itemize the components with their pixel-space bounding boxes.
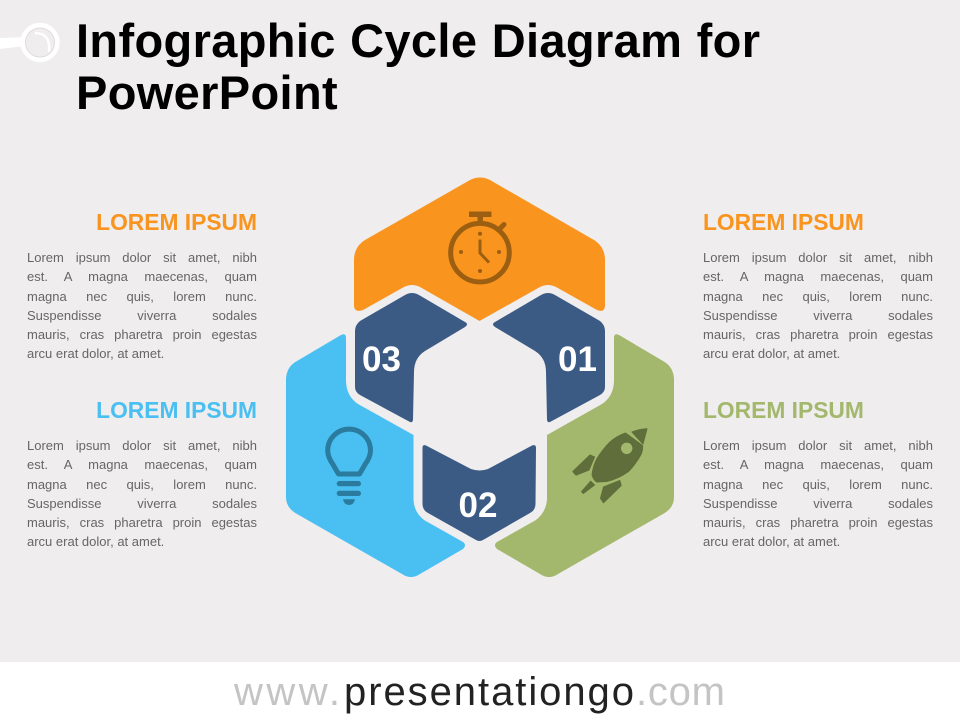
- text block: orange left: Lorem ipsum dolor sit amet, nibh: [27, 250, 257, 265]
- text block: orange left: magna nec quis, lorem nunc.: [27, 289, 257, 304]
- title: PowerPoint: [76, 66, 338, 119]
- text block: green right: Suspendisse viverra sodales: [703, 496, 933, 511]
- footer band: presentationgo: [344, 670, 634, 714]
- text block: orange right: mauris, cras pharetra proin egestas: [703, 327, 933, 342]
- text block: orange left: [27, 250, 257, 361]
- icon: stopwatch: [451, 212, 509, 282]
- heading: orange left: LOREM IPSUM: [96, 209, 257, 235]
- text block: blue left: Lorem ipsum dolor sit amet, nibh: [27, 438, 257, 453]
- text block: blue left: arcu erat dolor, at amet.: [27, 534, 164, 549]
- text block: green right: Lorem ipsum dolor sit amet, nibh: [703, 438, 933, 453]
- orange segment: [354, 178, 605, 321]
- footer band: .com: [636, 670, 725, 714]
- footer band: www.: [233, 670, 340, 714]
- text block: orange left: arcu erat dolor, at amet.: [27, 346, 164, 361]
- number 01: 01: [558, 340, 597, 379]
- panel: bottom right text: [703, 397, 933, 549]
- title: [76, 14, 760, 119]
- text block: orange right: est. A magna maecenas, quam: [703, 269, 933, 284]
- green segment: [495, 334, 674, 577]
- footer band: [0, 662, 960, 720]
- icon: rocket: [573, 429, 647, 503]
- text block: orange right: magna nec quis, lorem nunc.: [703, 289, 933, 304]
- panel: top left text: [27, 209, 257, 361]
- navy segment 03: [355, 293, 467, 422]
- text block: green right: [703, 438, 933, 549]
- number 02: 02: [458, 486, 497, 525]
- panel: bottom left text: [27, 397, 257, 549]
- icon: light bulb: [328, 429, 370, 505]
- text block: blue left: magna nec quis, lorem nunc.: [27, 477, 257, 492]
- panel: top right text: [703, 209, 933, 361]
- text block: blue left: est. A magna maecenas, quam: [27, 457, 257, 472]
- navy segment 02: [422, 445, 536, 541]
- text block: orange right: arcu erat dolor, at amet.: [703, 346, 840, 361]
- heading: green right: LOREM IPSUM: [703, 397, 864, 423]
- text block: orange left: est. A magna maecenas, quam: [27, 269, 257, 284]
- number 03: 03: [362, 340, 401, 379]
- text block: orange right: Lorem ipsum dolor sit amet, nibh: [703, 250, 933, 265]
- title: Infographic Cycle Diagram for: [76, 14, 760, 67]
- text block: blue left: [27, 438, 257, 549]
- text block: orange left: mauris, cras pharetra proin egestas: [27, 327, 257, 342]
- heading: orange right: LOREM IPSUM: [703, 209, 864, 235]
- heading: blue left: LOREM IPSUM: [96, 397, 257, 423]
- icon: ring marker: [0, 25, 57, 60]
- navy segment 01: [493, 293, 605, 422]
- text block: orange right: [703, 250, 933, 361]
- text block: blue left: Suspendisse viverra sodales: [27, 496, 257, 511]
- text block: orange left: Suspendisse viverra sodales: [27, 308, 257, 323]
- blue segment: [286, 334, 465, 577]
- text block: blue left: mauris, cras pharetra proin egestas: [27, 515, 257, 530]
- text block: green right: magna nec quis, lorem nunc.: [703, 477, 933, 492]
- text block: green right: est. A magna maecenas, quam: [703, 457, 933, 472]
- text block: orange right: Suspendisse viverra sodales: [703, 308, 933, 323]
- text block: green right: arcu erat dolor, at amet.: [703, 534, 840, 549]
- text block: green right: mauris, cras pharetra proin egestas: [703, 515, 933, 530]
